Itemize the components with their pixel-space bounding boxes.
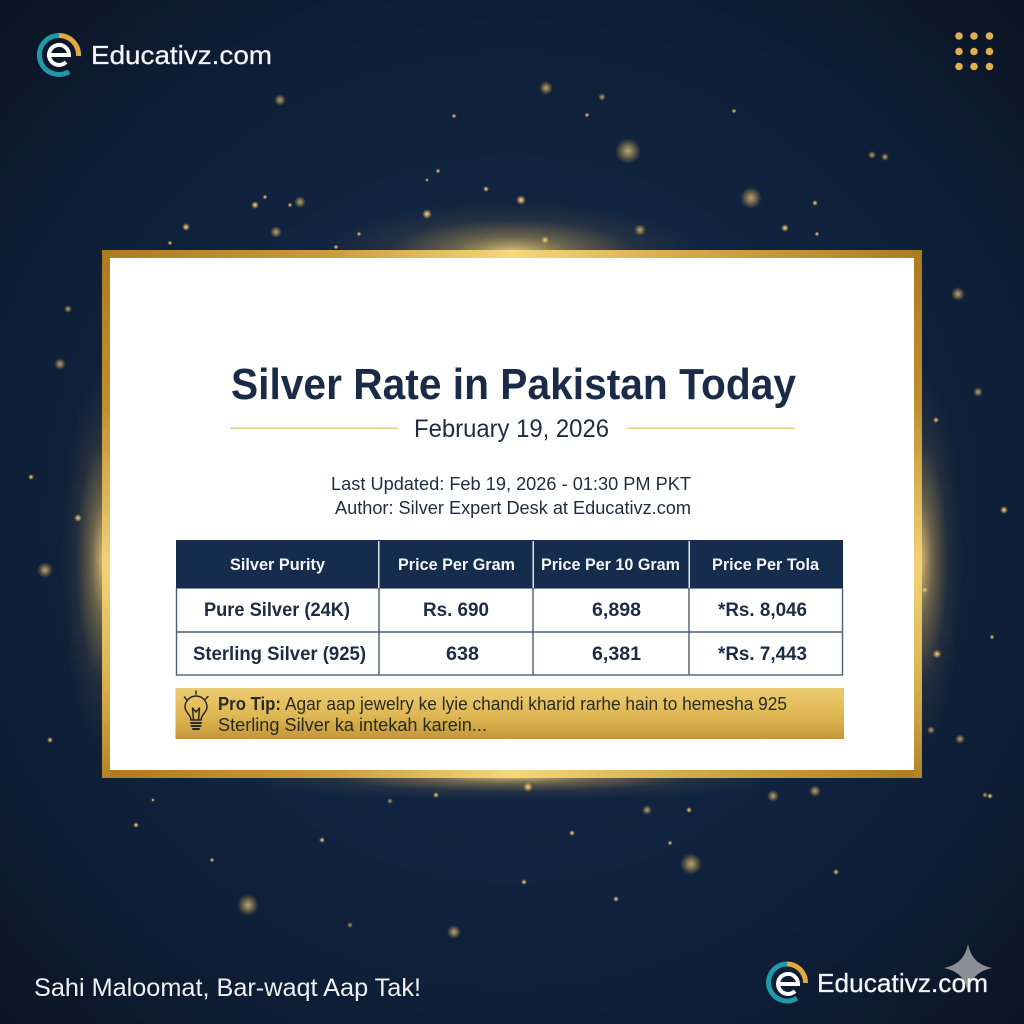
table header: Price Per Tola xyxy=(712,555,820,574)
last updated and author: Author: Silver Expert Desk at Educativz.com xyxy=(335,498,691,518)
price table xyxy=(176,540,843,675)
last updated and author xyxy=(331,474,691,518)
icon: educativz ring xyxy=(39,35,79,74)
row: pure silver: Rs. 690 xyxy=(423,600,489,621)
table header xyxy=(176,540,843,588)
tip text: Agar aap jewelry ke lyie chandi kharid rarhe hain to hemesha 925 xyxy=(285,694,787,714)
bottom logo xyxy=(769,964,988,1001)
row: pure silver xyxy=(204,600,807,621)
table header: Price Per Gram xyxy=(398,555,515,574)
card gold border xyxy=(102,250,922,778)
pro tip banner xyxy=(176,688,844,739)
tip text: Sterling Silver ka intekah karein... xyxy=(218,715,487,735)
row: sterling silver xyxy=(193,644,807,665)
logo wordmark: Educativz.com xyxy=(817,968,988,998)
bright small particles xyxy=(28,108,1008,902)
date with rules: February 19, 2026 xyxy=(414,415,609,443)
banner background xyxy=(176,688,844,739)
last updated and author: Last Updated: Feb 19, 2026 - 01:30 PM PKT xyxy=(331,474,691,494)
footer tagline: Sahi Maloomat, Bar-waqt Aap Tak! xyxy=(34,974,421,1002)
row: pure silver: *Rs. 8,046 xyxy=(718,600,807,621)
row: sterling silver: 6,381 xyxy=(592,644,641,665)
row: sterling silver: 638 xyxy=(446,644,479,665)
icon: grey sparkle xyxy=(944,944,992,992)
icon: light bulb xyxy=(184,691,208,729)
large soft particles xyxy=(37,81,988,939)
tip text xyxy=(218,694,787,735)
table grid xyxy=(176,588,843,675)
main card xyxy=(102,250,922,778)
logo wordmark: Educativz.com xyxy=(91,40,272,70)
top logo xyxy=(39,35,272,74)
row: pure silver: 6,898 xyxy=(592,600,641,621)
icon: educativz ring xyxy=(769,964,806,1001)
row: pure silver: Pure Silver (24K) xyxy=(204,600,350,621)
title: Silver Rate in Pakistan Today xyxy=(231,360,796,409)
row: sterling silver: *Rs. 7,443 xyxy=(718,644,807,665)
card white panel xyxy=(110,258,914,770)
tip text: Pro Tip: xyxy=(218,694,281,714)
row: sterling silver: Sterling Silver (925) xyxy=(193,644,366,665)
table header: Price Per 10 Gram xyxy=(541,555,680,574)
frame glow xyxy=(62,202,962,800)
table header: Silver Purity xyxy=(230,555,326,574)
decorative dot grid xyxy=(955,32,993,70)
